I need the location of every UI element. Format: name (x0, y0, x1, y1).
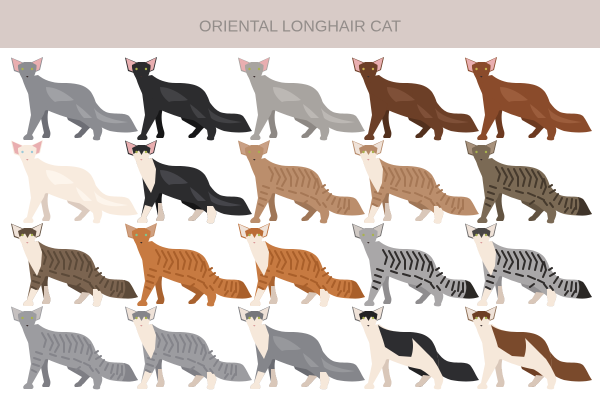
title banner (0, 0, 600, 48)
cat: lilac solid (238, 57, 365, 140)
cat: red tabby bicolor (238, 223, 365, 306)
cat: tan tabby (238, 140, 365, 223)
cat: black solid (125, 57, 252, 140)
cat: cream white (11, 140, 138, 223)
cat: chocolate van (465, 306, 592, 389)
title: ORIENTAL LONGHAIR CAT (199, 18, 401, 36)
cat: blue tabby (11, 306, 138, 389)
cat: blue bicolor (238, 306, 365, 389)
cat: brown tabby bicolor (11, 223, 138, 306)
cat: black and white bicolor (125, 140, 252, 223)
cat: brown tabby (465, 140, 592, 223)
cat: blue tabby bicolor (125, 306, 252, 389)
cat: cinnamon solid (465, 57, 592, 140)
cat: chocolate solid (352, 57, 479, 140)
cat: black van (352, 306, 479, 389)
cat: silver tabby (352, 223, 479, 306)
cat: red tabby (125, 223, 252, 306)
cat: silver tabby bicolor (465, 223, 592, 306)
cat: blue solid (11, 57, 138, 140)
cat: tan tabby bicolor (352, 140, 479, 223)
